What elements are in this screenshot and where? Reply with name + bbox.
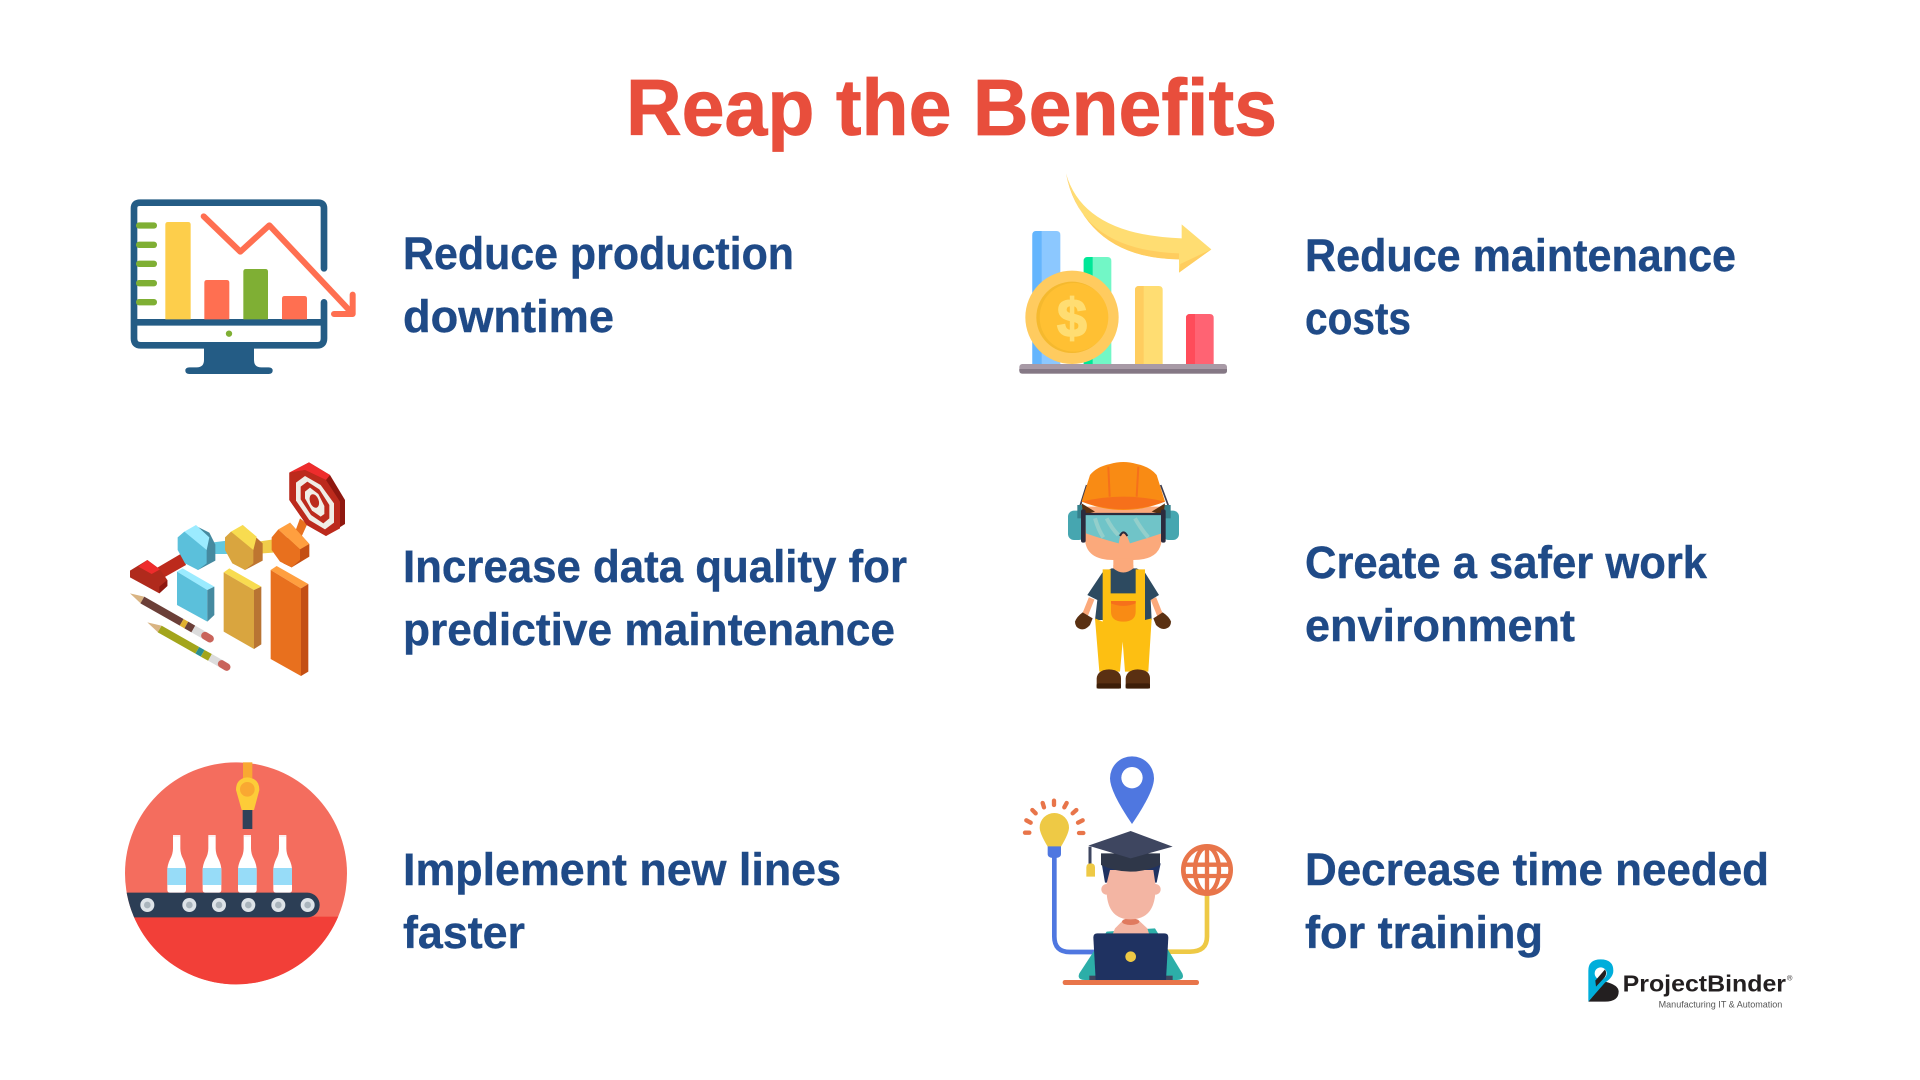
- heading: reduce maintenance costs: Reduce maintenance: [1305, 230, 1736, 281]
- heading: safer work environment: Create a safer work: [1305, 537, 1708, 588]
- icon: isometric path to target: [130, 462, 345, 676]
- logo: ProjectBinder: ®: [1787, 974, 1793, 983]
- title: Reap the Benefits: [626, 63, 1277, 152]
- icon: safety worker: [1068, 462, 1179, 689]
- heading: reduce maintenance costs: costs: [1305, 293, 1411, 344]
- heading: increase data quality: predictive maintenance: [403, 604, 895, 655]
- heading: implement new lines: [403, 844, 841, 958]
- heading: decrease training time: [1305, 844, 1769, 958]
- heading: safer work environment: [1305, 537, 1708, 651]
- heading: reduce production downtime: [403, 228, 794, 342]
- heading: reduce maintenance costs: [1305, 230, 1736, 344]
- heading: reduce production downtime: Reduce production: [403, 228, 794, 279]
- icon: monitor with falling chart: [134, 203, 353, 374]
- icon: graduate with laptop: [1025, 756, 1231, 985]
- logo: ProjectBinder: [1588, 959, 1793, 1010]
- blue hexagon joint: [178, 525, 215, 570]
- icon: coin and falling bars: $: [1057, 290, 1087, 349]
- heading: implement new lines: faster: [403, 907, 525, 958]
- logo: ProjectBinder: Manufacturing IT & Automation: [1659, 1000, 1782, 1010]
- heading: implement new lines: Implement new lines: [403, 844, 841, 895]
- heading: safer work environment: environment: [1305, 600, 1575, 651]
- heading: decrease training time: for training: [1305, 907, 1543, 958]
- heading: increase data quality: Increase data quality for: [403, 541, 907, 592]
- icon: coin and falling bars: [1019, 173, 1227, 374]
- icon: bottling line: [125, 762, 347, 984]
- heading: increase data quality: [403, 541, 907, 655]
- heading: reduce production downtime: downtime: [403, 291, 614, 342]
- heading: decrease training time: Decrease time needed: [1305, 844, 1769, 895]
- logo: ProjectBinder: ProjectBinder: [1623, 971, 1786, 997]
